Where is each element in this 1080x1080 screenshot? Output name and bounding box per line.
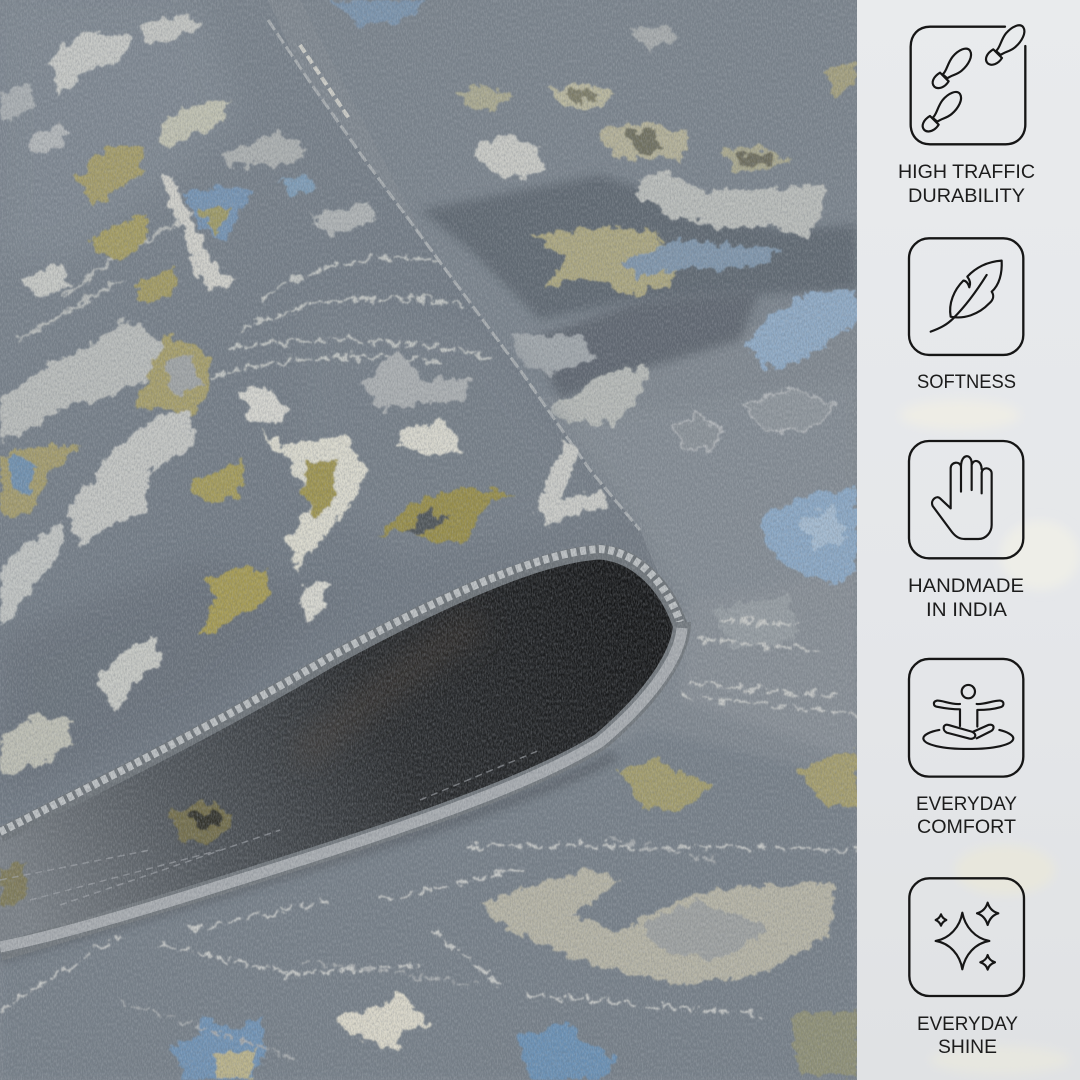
feature: handmade in india: [908, 441, 1024, 621]
label: HIGH TRAFFIC: [898, 162, 1035, 183]
rug fold: top face: [0, 0, 680, 835]
icon: hand: [909, 441, 1023, 558]
label: EVERYDAY: [917, 1014, 1018, 1035]
beaded selvedge edge: [0, 552, 680, 835]
label: HANDMADE: [908, 576, 1024, 597]
motifs: upper right field: [330, 0, 857, 650]
rug photo: lower layer: [0, 0, 860, 1080]
icon: footprints: [911, 25, 1025, 144]
side panel background: [857, 0, 1080, 1080]
feature: high traffic durability: [898, 25, 1035, 207]
feature: everyday comfort: COMFORT: [917, 817, 1016, 838]
rug bottom lip: [0, 622, 682, 958]
rug underside in shadow: [0, 555, 680, 950]
label: EVERYDAY: [916, 794, 1017, 815]
feature: softness: [909, 238, 1023, 393]
feature: everyday comfort: [909, 659, 1023, 838]
label: SOFTNESS: [917, 372, 1016, 393]
feature: everyday shine: [909, 878, 1024, 1058]
border lines along fold: [268, 20, 640, 530]
rug texture: [0, 0, 857, 1080]
motifs on fold: [50, 30, 130, 95]
feature: high traffic durability: DURABILITY: [908, 186, 1025, 207]
feature: handmade in india: IN INDIA: [926, 600, 1007, 621]
motifs: lower field: [0, 620, 857, 1080]
icon: sparkles: [909, 878, 1024, 996]
icon: feather: [909, 238, 1023, 355]
feature: everyday shine: SHINE: [938, 1037, 997, 1058]
icon: seated figure: [909, 659, 1023, 777]
